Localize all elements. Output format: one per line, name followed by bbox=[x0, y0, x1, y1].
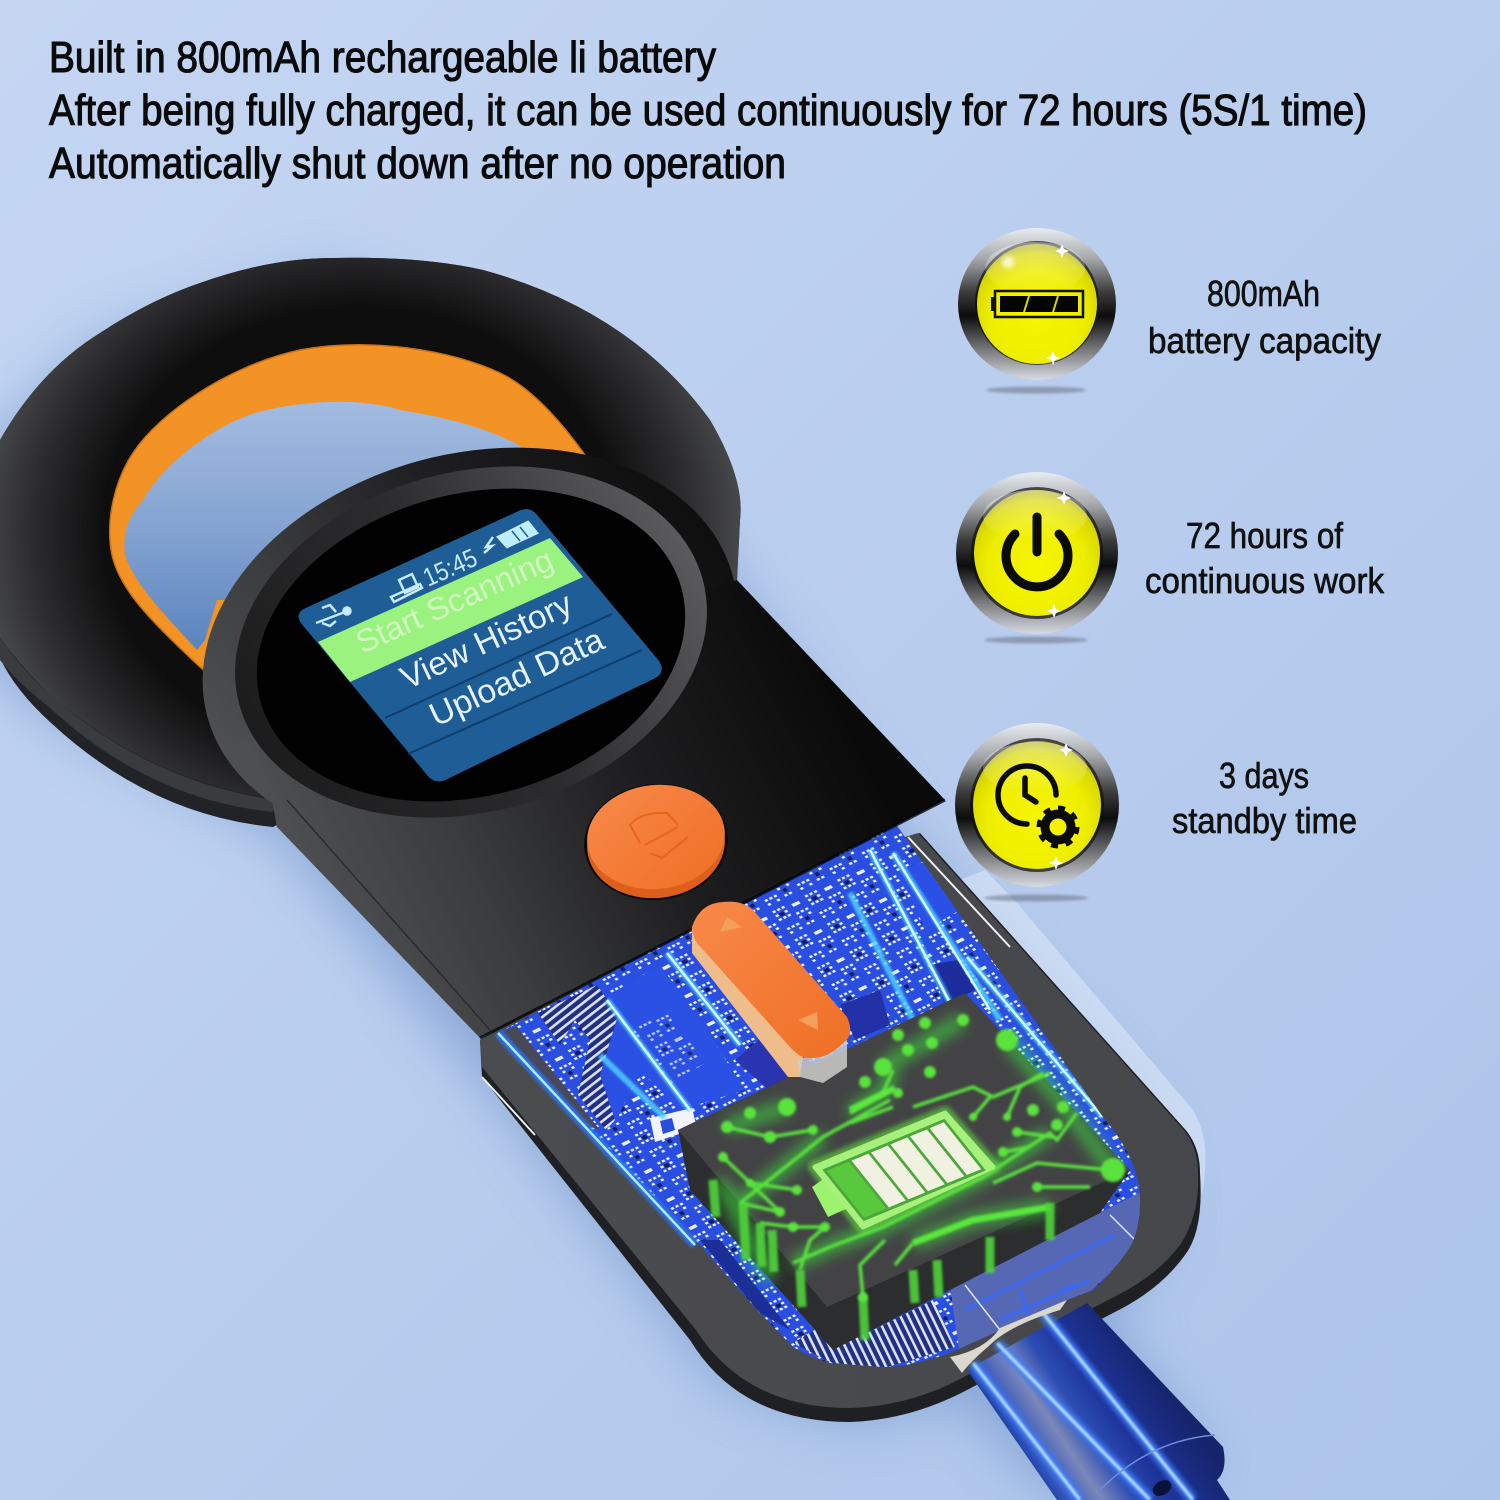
icon: battery capacity badge bbox=[958, 228, 1116, 394]
status bar bbox=[316, 522, 537, 626]
label: continuous work: continuous work bbox=[1145, 560, 1385, 601]
device: front cover bbox=[158, 390, 945, 1038]
icon: power badge bbox=[956, 472, 1118, 644]
glowing board lines bbox=[600, 850, 1103, 1118]
label: battery capacity bbox=[1148, 273, 1381, 361]
menu text bbox=[350, 541, 610, 733]
status bar: 15:45 bbox=[418, 542, 482, 592]
power glyph bbox=[1006, 517, 1068, 587]
battery charge icon bbox=[812, 1113, 993, 1227]
striped chevron traces bbox=[538, 985, 618, 1130]
label: standby time bbox=[1172, 755, 1357, 841]
green circuit traces glow bbox=[720, 1020, 1113, 1280]
screen lens bbox=[221, 443, 721, 847]
green trace nodes bbox=[718, 1014, 1125, 1302]
cover bevel bbox=[287, 800, 490, 1030]
body white highlights bbox=[482, 837, 1010, 1135]
chip with white pads bbox=[650, 1108, 697, 1142]
label: standby time: 3 days bbox=[1219, 755, 1309, 796]
highlighted menu row bbox=[318, 538, 583, 682]
green circuit traces bbox=[723, 1070, 1110, 1297]
orange round button bbox=[578, 777, 734, 907]
ring opening bbox=[124, 402, 620, 650]
display screen bbox=[300, 511, 660, 780]
heading text block: Automatically shut down after no operation bbox=[49, 139, 786, 188]
menu text: Start Scanning bbox=[350, 541, 559, 660]
label: standby time: standby time bbox=[1172, 800, 1357, 841]
dark channel bbox=[700, 1240, 790, 1330]
label: continuous work bbox=[1145, 515, 1385, 601]
heading text block: Built in 800mAh rechargeable li battery bbox=[49, 33, 716, 82]
battery block side traces bbox=[713, 1180, 1050, 1340]
device: translucent shell bbox=[960, 870, 1206, 1200]
lower translucent window bbox=[950, 1190, 1145, 1355]
device: scanner body bbox=[480, 833, 1201, 1422]
icon: standby clock badge bbox=[955, 723, 1119, 902]
cover edge bbox=[480, 800, 945, 1038]
circuit component dots bbox=[506, 825, 1140, 1367]
menu divider lines bbox=[385, 614, 642, 754]
gear glyph bbox=[1039, 808, 1077, 846]
battery block bbox=[678, 993, 1130, 1350]
heading text block bbox=[49, 33, 1367, 188]
circuit board window bbox=[498, 825, 1140, 1367]
side glow line on body bbox=[498, 1033, 695, 1245]
battery glyph bbox=[991, 291, 1083, 317]
bright board patches bbox=[592, 965, 745, 1130]
menu text: View History bbox=[394, 584, 578, 696]
USB cable bbox=[950, 1300, 1230, 1500]
sparse components on patch bbox=[632, 1014, 710, 1084]
label: battery capacity: 800mAh bbox=[1207, 273, 1320, 314]
orange inner wall bbox=[110, 345, 640, 673]
screen bezel bbox=[195, 416, 747, 868]
clock glyph bbox=[998, 766, 1056, 824]
label: battery capacity: battery capacity bbox=[1148, 320, 1381, 361]
menu text: Upload Data bbox=[423, 620, 610, 733]
cable collar bbox=[950, 1300, 1067, 1373]
label: continuous work: 72 hours of bbox=[1186, 515, 1344, 556]
orange pill button bbox=[692, 902, 850, 1083]
device: scanner ring bbox=[0, 258, 741, 827]
device shadow bbox=[0, 270, 1220, 1500]
